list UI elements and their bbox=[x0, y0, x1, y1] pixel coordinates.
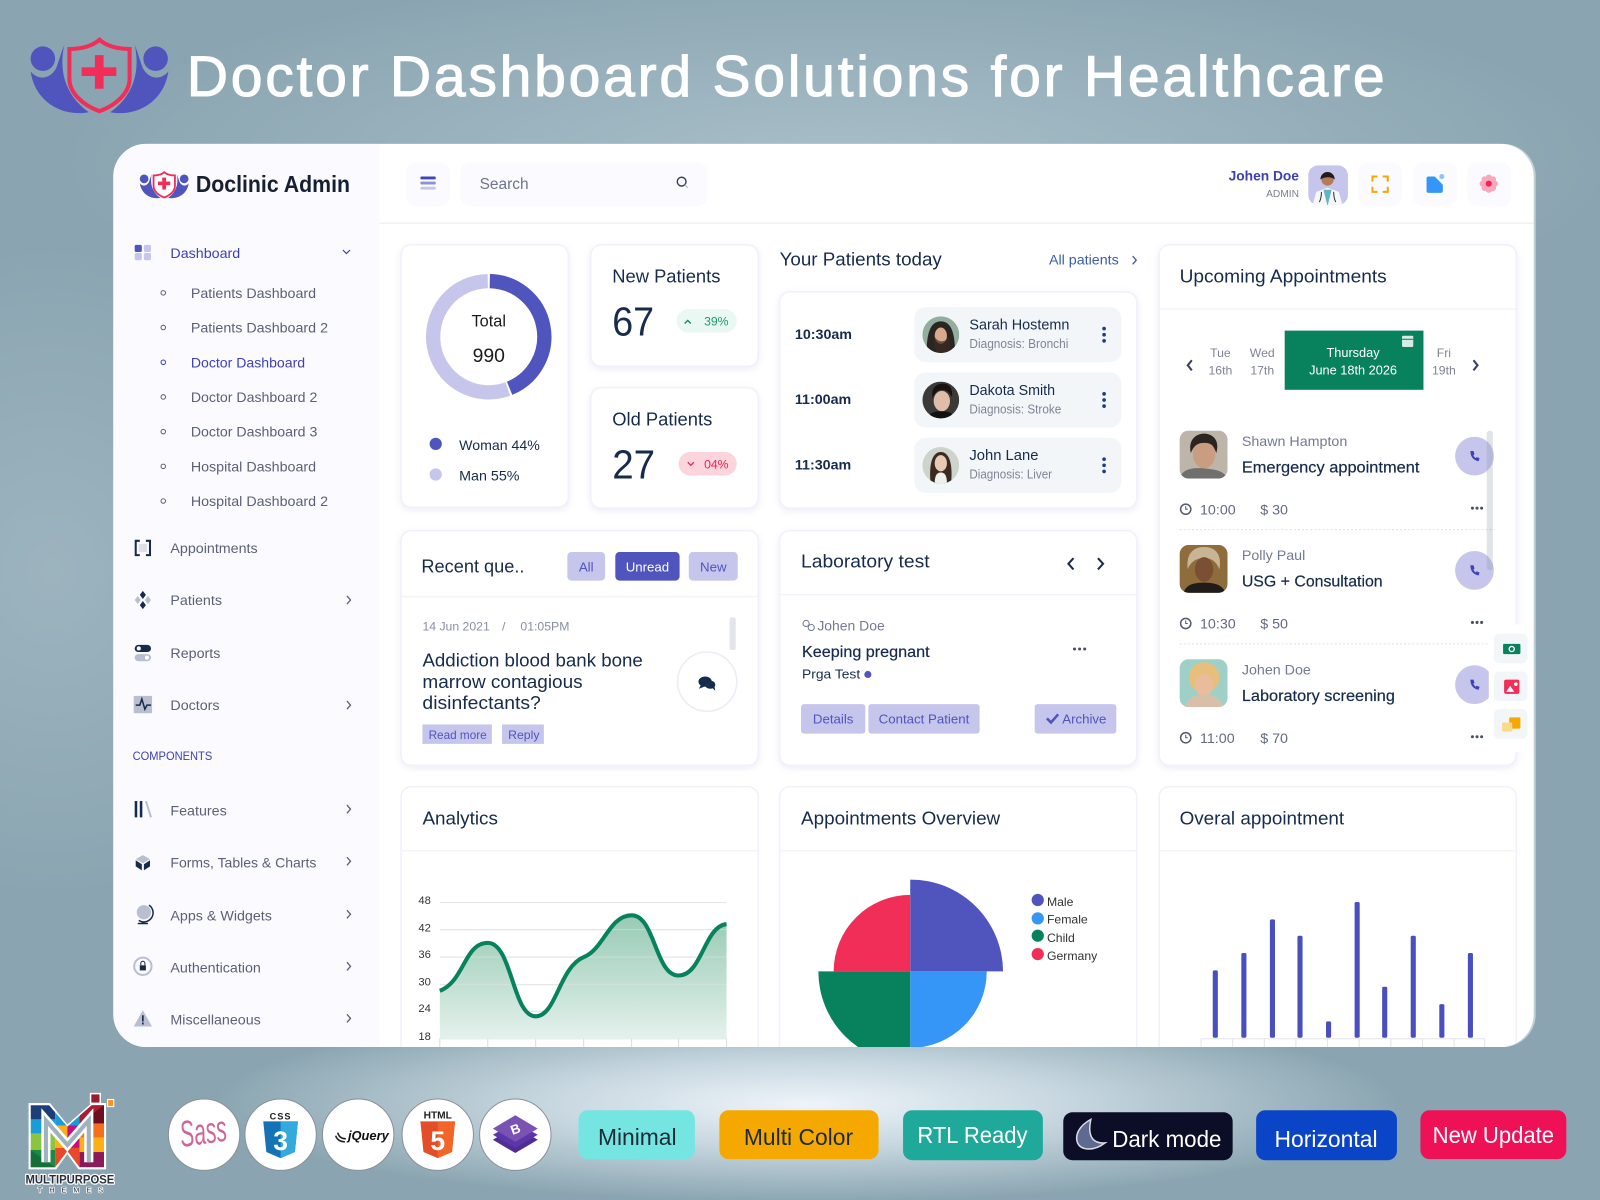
query text: Addiction blood bank bone bbox=[422, 649, 643, 670]
panel: floating quick actions bbox=[1489, 624, 1531, 752]
tabs bbox=[567, 552, 738, 581]
pie legend: Child bbox=[1047, 931, 1075, 945]
panel: overall appointment bbox=[1159, 787, 1516, 1072]
badge: horizontal: Horizontal bbox=[1274, 1126, 1378, 1152]
row: John Lane: Diagnosis: Liver bbox=[969, 467, 1053, 482]
date picker: 19th bbox=[1432, 363, 1456, 377]
row: John Lane bbox=[795, 438, 1121, 493]
icon: jquery: jQuery bbox=[346, 1128, 389, 1143]
lab test content: Johen Doe bbox=[817, 619, 885, 634]
heading: your patients today: All patients bbox=[1049, 252, 1119, 268]
scrollbar bbox=[1487, 431, 1493, 570]
appointment: Shawn Hampton: 10:00 bbox=[1200, 502, 1236, 518]
icon: html5 bbox=[402, 1099, 473, 1170]
user name: Johen Doe bbox=[1229, 169, 1299, 184]
appointment: Polly Paul bbox=[1180, 545, 1495, 644]
row: Sarah Hostemn: Sarah Hostemn bbox=[969, 318, 1069, 334]
row: Sarah Hostemn: 10:30am bbox=[795, 327, 852, 343]
lab test actions: Archive bbox=[1062, 711, 1106, 726]
lab test content bbox=[802, 619, 1086, 682]
menu: miscellaneous: Miscellaneous bbox=[170, 1012, 261, 1028]
appointment: Johen Doe bbox=[1180, 659, 1494, 747]
menu: authentication: Authentication bbox=[170, 960, 261, 976]
menu: dashboard: Dashboard bbox=[170, 246, 240, 262]
query date: 01:05PM bbox=[520, 620, 569, 634]
menu: miscellaneous bbox=[134, 1010, 351, 1028]
row: Dakota Smith: Diagnosis: Stroke bbox=[969, 401, 1061, 416]
button: hamburger menu bbox=[420, 176, 436, 190]
submenu list bbox=[161, 286, 328, 510]
menu: apps and widgets bbox=[137, 905, 351, 924]
menu: doctors: Doctors bbox=[170, 698, 220, 714]
menu: forms tables charts: Forms, Tables & Charts bbox=[170, 855, 316, 871]
legend: Man 55% bbox=[459, 469, 520, 485]
panel: appointments overview: Appointments Overview bbox=[801, 807, 1001, 828]
menu: reports: Reports bbox=[170, 646, 220, 662]
appointment: Johen Doe: Laboratory screening bbox=[1242, 688, 1395, 705]
user avatar bbox=[1308, 165, 1348, 206]
area chart bbox=[418, 895, 727, 1047]
area chart: 36 bbox=[418, 949, 431, 961]
icon: html5: HTML bbox=[424, 1110, 452, 1121]
panel: old patients: 27 bbox=[612, 442, 655, 488]
button: notifications bbox=[1426, 174, 1444, 193]
icon: css3: 3 bbox=[273, 1126, 288, 1156]
panel: laboratory test bbox=[780, 531, 1137, 765]
lab test actions: Details bbox=[813, 711, 854, 726]
date picker: Thursday bbox=[1326, 345, 1380, 360]
submenu list: Hospital Dashboard bbox=[191, 459, 316, 475]
submenu list: Doctor Dashboard 3 bbox=[191, 425, 317, 441]
menu: appointments: Appointments bbox=[170, 541, 258, 557]
icon: sidebar logo bbox=[140, 172, 189, 198]
icon: bootstrap: B bbox=[508, 1120, 523, 1138]
icon: multipurpose themes logo bbox=[26, 1093, 114, 1194]
icon: main logo shield with people bbox=[31, 40, 168, 113]
appointment: Polly Paul: Polly Paul bbox=[1242, 548, 1305, 564]
query date: / bbox=[502, 620, 506, 634]
brand name: THEMES bbox=[38, 1186, 103, 1194]
top bar bbox=[406, 162, 1511, 206]
panel: analytics: Analytics bbox=[422, 807, 498, 828]
row: Dakota Smith: 11:00am bbox=[795, 392, 851, 408]
query text bbox=[422, 649, 643, 713]
appointment: Johen Doe: $ 70 bbox=[1260, 731, 1288, 747]
menu section: components: COMPONENTS bbox=[133, 749, 212, 763]
icon: bootstrap bbox=[480, 1099, 551, 1170]
lab test content: Prga Test bbox=[802, 667, 861, 682]
panel: old patients: Old Patients bbox=[612, 409, 712, 430]
date picker: June 18th 2026 bbox=[1309, 362, 1397, 377]
date picker bbox=[1188, 331, 1478, 390]
appointment: Shawn Hampton: $ 30 bbox=[1260, 502, 1288, 518]
dashboard window bbox=[113, 144, 1536, 1072]
tabs: New bbox=[700, 559, 727, 574]
row: John Lane: John Lane bbox=[969, 448, 1038, 464]
pie legend: Germany bbox=[1047, 949, 1098, 963]
query date bbox=[422, 620, 569, 634]
row: Sarah Hostemn: Diagnosis: Bronchi bbox=[969, 336, 1068, 351]
lab test content: Keeping pregnant bbox=[802, 644, 930, 661]
bar chart bbox=[1201, 902, 1485, 1047]
menu: patients: Patients bbox=[170, 593, 222, 609]
badge: rtl ready: RTL Ready bbox=[917, 1122, 1028, 1148]
icon: sass: Sass bbox=[177, 1108, 229, 1155]
button: fullscreen bbox=[1371, 176, 1389, 193]
panel: analytics bbox=[401, 787, 758, 1072]
icon: css3: CSS bbox=[270, 1111, 292, 1121]
icon: jquery bbox=[322, 1099, 394, 1170]
panel: patient gender donut bbox=[401, 245, 568, 507]
area chart: 18 bbox=[418, 1031, 431, 1043]
area chart: 30 bbox=[418, 977, 431, 989]
panel: recent queries: Recent que.. bbox=[421, 555, 524, 576]
pie legend: Female bbox=[1047, 912, 1088, 926]
icon: chat bubble bbox=[678, 652, 737, 711]
badge: new update bbox=[1420, 1110, 1566, 1159]
donut total: Total bbox=[472, 313, 506, 331]
menu: dashboard bbox=[135, 245, 350, 262]
query actions: Reply bbox=[508, 728, 540, 742]
badge: down 04 percent: 04% bbox=[704, 457, 729, 471]
panel: new patients: 67 bbox=[612, 299, 654, 345]
donut total: 990 bbox=[473, 345, 505, 367]
appointment: Johen Doe: Johen Doe bbox=[1242, 662, 1311, 678]
badge: minimal: Minimal bbox=[598, 1124, 677, 1150]
menu: patients bbox=[135, 591, 351, 609]
heading: your patients today: Your Patients today bbox=[780, 248, 943, 269]
scrollbar bbox=[730, 617, 736, 650]
appointment: Shawn Hampton: Emergency appointment bbox=[1242, 459, 1420, 476]
search box: Search bbox=[480, 176, 529, 193]
menu: forms tables charts bbox=[136, 855, 351, 871]
title: Doctor Dashboard Solutions for Healthcare bbox=[187, 45, 1385, 109]
date picker: 17th bbox=[1250, 363, 1274, 377]
query text: disinfectants? bbox=[422, 692, 541, 713]
panel: new patients bbox=[591, 245, 758, 366]
appointment: Shawn Hampton bbox=[1180, 431, 1495, 530]
menu: doctors bbox=[134, 696, 351, 714]
badge: rtl ready bbox=[903, 1110, 1043, 1160]
query actions: Read more bbox=[429, 728, 487, 742]
menu: apps and widgets: Apps & Widgets bbox=[170, 908, 272, 924]
panel: upcoming appointments: Upcoming Appointments bbox=[1180, 266, 1387, 287]
menu: authentication bbox=[134, 958, 351, 976]
panel: patients schedule bbox=[780, 292, 1137, 508]
badge: dark mode bbox=[1063, 1112, 1233, 1160]
badge: minimal bbox=[579, 1110, 695, 1159]
query text: marrow contagious bbox=[422, 671, 583, 692]
panel: new patients: New Patients bbox=[612, 266, 720, 287]
menu: reports bbox=[135, 645, 220, 662]
appointment: Polly Paul: $ 50 bbox=[1260, 617, 1288, 633]
panel: overall appointment: Overal appointment bbox=[1180, 807, 1345, 828]
button: settings bbox=[1480, 174, 1498, 193]
badge: down 04 percent bbox=[679, 452, 737, 476]
date picker: Tue bbox=[1210, 346, 1231, 360]
pie legend bbox=[1032, 894, 1098, 963]
legend: Woman 44% bbox=[459, 438, 540, 454]
row: Sarah Hostemn bbox=[795, 307, 1121, 362]
brand name: MULTIPURPOSE bbox=[26, 1173, 114, 1187]
row: Dakota Smith bbox=[795, 372, 1121, 428]
panel: upcoming appointments bbox=[1159, 245, 1516, 765]
user name bbox=[1228, 170, 1298, 197]
icon: html5: 5 bbox=[430, 1126, 445, 1156]
badge: horizontal bbox=[1256, 1110, 1397, 1160]
query actions bbox=[422, 724, 544, 744]
rose pie chart bbox=[818, 880, 1003, 1063]
icon: sass bbox=[168, 1099, 240, 1170]
panel: appointments overview bbox=[780, 787, 1137, 1072]
lab test actions: Contact Patient bbox=[879, 711, 970, 726]
appointment: Polly Paul: USG + Consultation bbox=[1242, 574, 1383, 591]
area chart: 42 bbox=[418, 923, 431, 935]
submenu list: Hospital Dashboard 2 bbox=[191, 494, 328, 510]
row: John Lane: 11:30am bbox=[795, 457, 851, 473]
user name: ADMIN bbox=[1266, 189, 1299, 200]
tabs: Unread bbox=[626, 559, 669, 574]
area chart: 48 bbox=[418, 895, 431, 907]
panel: recent queries bbox=[401, 531, 758, 765]
menu: features: Features bbox=[170, 803, 227, 819]
appointment: Johen Doe: 11:00 bbox=[1200, 731, 1235, 747]
badge: multi color: Multi Color bbox=[744, 1124, 853, 1150]
lab test actions bbox=[801, 704, 1116, 734]
area chart: 24 bbox=[418, 1003, 431, 1015]
date picker: 16th bbox=[1209, 363, 1233, 377]
panel: sidebar navigation bbox=[133, 171, 351, 1028]
sidebar brand name: Doclinic Admin bbox=[196, 171, 350, 197]
badge: new update: New Update bbox=[1433, 1122, 1554, 1148]
icon: css3 bbox=[245, 1099, 316, 1170]
date picker: Fri bbox=[1437, 346, 1451, 360]
appointment: Shawn Hampton: Shawn Hampton bbox=[1242, 434, 1347, 450]
badge: up 39 percent bbox=[677, 309, 737, 333]
submenu list: Patients Dashboard bbox=[191, 286, 316, 302]
appointment: Polly Paul: 10:30 bbox=[1200, 617, 1236, 633]
search box bbox=[480, 176, 688, 189]
donut total bbox=[472, 314, 505, 362]
heading: your patients today bbox=[780, 252, 1137, 270]
brand name bbox=[26, 1173, 114, 1194]
badge: up 39 percent: 39% bbox=[704, 315, 729, 329]
submenu list: Patients Dashboard 2 bbox=[191, 321, 328, 337]
legend bbox=[430, 438, 540, 485]
submenu list: Doctor Dashboard bbox=[191, 355, 305, 371]
query date: 14 Jun 2021 bbox=[422, 620, 490, 634]
tabs: All bbox=[579, 559, 594, 574]
donut chart bbox=[433, 281, 544, 392]
row: Dakota Smith: Dakota Smith bbox=[969, 383, 1055, 399]
panel: laboratory test: Laboratory test bbox=[801, 550, 930, 571]
panel: old patients bbox=[591, 388, 758, 508]
badge: multi color bbox=[719, 1110, 879, 1159]
menu: features bbox=[135, 801, 351, 819]
date picker: Wed bbox=[1250, 346, 1275, 360]
submenu list: Doctor Dashboard 2 bbox=[191, 390, 317, 406]
pie legend: Male bbox=[1047, 895, 1074, 909]
badge: dark mode: Dark mode bbox=[1112, 1126, 1221, 1152]
